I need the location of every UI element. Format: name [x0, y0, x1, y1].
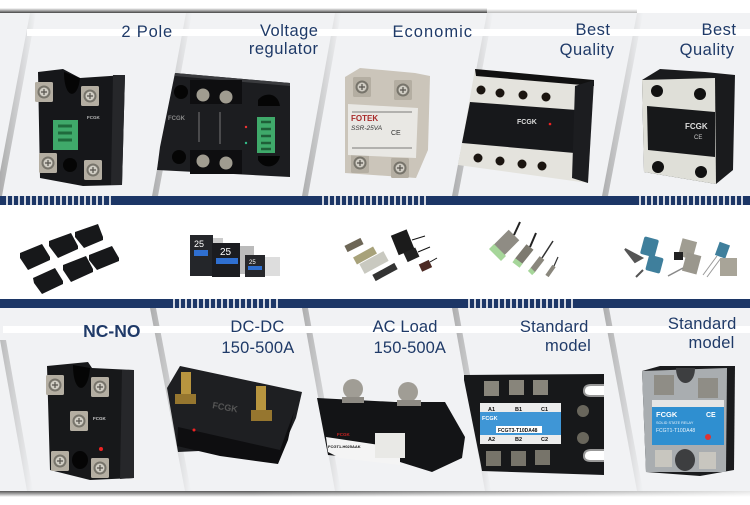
- product: temperature controllers: 25: [220, 247, 232, 258]
- bottom shadow strip: [0, 491, 750, 497]
- panel: bottom row background: [0, 308, 750, 491]
- product: economic relay: CE: [391, 130, 401, 137]
- heading: Standard model (3-phase): Standard: [520, 318, 588, 336]
- product: DC-DC modules: [20, 224, 119, 294]
- product: temperature controllers: [190, 235, 280, 277]
- product: three-phase standard relay: FCGK: [482, 416, 498, 422]
- product: three-phase relay, white: FCGK: [517, 119, 537, 126]
- panel: top row background: [0, 13, 750, 196]
- product: 2 pole relay: [35, 69, 125, 186]
- top shadow strip: [0, 8, 637, 13]
- product: three-phase relay, white: [458, 69, 594, 183]
- heading: 2 Pole: 2 Pole: [121, 23, 173, 41]
- product: three-phase standard relay: A2: [488, 437, 495, 443]
- heading: NC-NO: NC-NO: [83, 321, 140, 341]
- product: AC load relay: [317, 379, 465, 472]
- product: single-phase standard relay: [642, 366, 735, 476]
- product: temperature controllers: 25: [249, 260, 256, 266]
- product: single-phase relay, white: FCGK: [685, 122, 708, 131]
- heading: Voltage regulator: Voltage: [260, 22, 318, 40]
- product: AC load relay: FCGK: [337, 432, 350, 437]
- product: three-phase standard relay: FCGT3-T10DA48: [498, 428, 538, 434]
- product: temperature controllers: 25: [194, 239, 204, 249]
- product: NC-NO relay: [46, 362, 134, 480]
- product: single-phase standard relay: FCGT1-T10DA48: [656, 428, 695, 434]
- product: voltage regulator: FCGK: [168, 116, 186, 122]
- product: economic relay: FOTEK: [351, 114, 378, 123]
- product: proximity sensors: [495, 222, 558, 276]
- heading: Best Quality (single phase): Quality: [680, 41, 735, 59]
- product: AC load relay: FCGT1-H025AAK: [328, 444, 361, 449]
- heading: Best Quality (3-phase): Quality: [560, 41, 615, 59]
- product: economic relay: SSR-25VA: [351, 125, 382, 132]
- heading: Standard model (3-phase): model: [545, 337, 591, 355]
- product: economic relay: [345, 68, 430, 178]
- heading: Standard model (single phase): Standard: [668, 315, 736, 333]
- product: single-phase standard relay: SOLID STATE RELAY: [656, 421, 694, 425]
- product: three-phase standard relay: C2: [541, 437, 548, 443]
- product: DC-DC high-current relay: [167, 366, 302, 464]
- product: three-phase standard relay: [464, 374, 604, 475]
- heading: Best Quality (3-phase): Best: [575, 21, 610, 39]
- heading: AC Load 150-500A: 150-500A: [374, 339, 446, 357]
- product: single-phase relay, white: CE: [694, 135, 702, 141]
- product: single-phase standard relay: CE: [706, 412, 716, 419]
- product: 2 pole relay: FCGK: [87, 115, 100, 120]
- product: single-phase relay, white: [642, 69, 735, 184]
- product: three-phase standard relay: B2: [515, 437, 522, 443]
- product: limit switches: [625, 236, 737, 277]
- heading: AC Load 150-500A: AC Load: [373, 318, 438, 336]
- product: photoelectric sensors: [346, 229, 437, 278]
- product: three-phase standard relay: C1: [541, 407, 548, 413]
- heading: Economic: Economic: [393, 23, 473, 41]
- product: three-phase standard relay: A1: [488, 407, 495, 413]
- product: NC-NO relay: FCGK: [93, 416, 106, 421]
- blue band: lower: [0, 299, 750, 308]
- heading: Standard model (single phase): model: [689, 334, 734, 352]
- product: DC-DC high-current relay: FCGK: [212, 400, 239, 414]
- product: single-phase standard relay: FCGK: [656, 410, 678, 419]
- heading: Voltage regulator: regulator: [249, 40, 319, 58]
- heading: Best Quality (single phase): Best: [701, 21, 736, 39]
- heading: DC-DC 150-500A: DC-DC: [230, 318, 284, 336]
- heading: DC-DC 150-500A: 150-500A: [221, 339, 294, 357]
- blue band: upper: [0, 196, 750, 205]
- product: three-phase standard relay: B1: [515, 407, 522, 413]
- product: voltage regulator: [157, 73, 290, 177]
